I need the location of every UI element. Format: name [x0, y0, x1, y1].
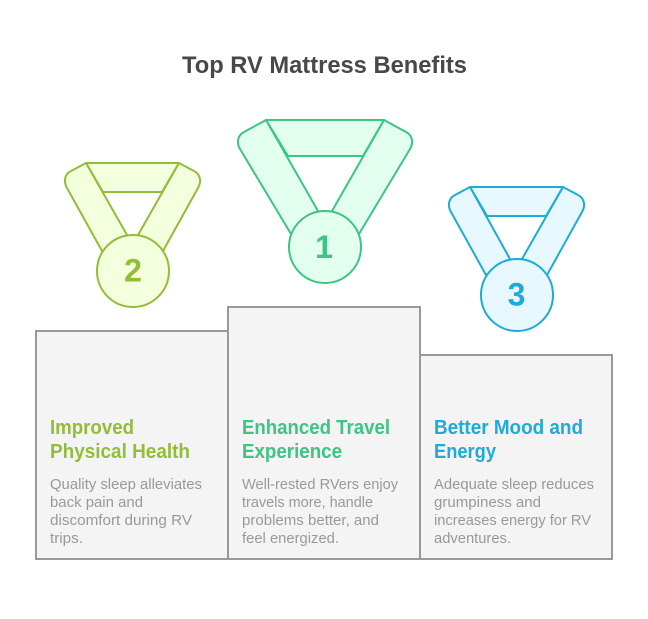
medal 3: blue [449, 187, 584, 331]
text: enhanced travel description: Well-rested RVers enjoy [242, 477, 399, 493]
panel: enhanced travel experience [228, 307, 420, 559]
text: enhanced travel description: problems better, and [242, 513, 379, 529]
medal 1: teal green [238, 120, 412, 283]
heading: improved physical health: Physical Health [50, 441, 190, 463]
text: improved physical health description: discomfort during RV [50, 513, 192, 529]
heading: enhanced travel experience: Experience [242, 441, 342, 463]
heading: better mood and energy: Better Mood and [434, 417, 583, 439]
text: improved physical health description: back pain and [50, 495, 143, 511]
medal number 1: 1 [315, 229, 333, 265]
text: improved physical health description: trips. [50, 531, 83, 547]
text: improved physical health description [50, 477, 202, 547]
medal number 3: 3 [508, 276, 525, 312]
text: enhanced travel description: feel energized. [242, 531, 339, 547]
text: better mood description: increases energy for RV [434, 513, 591, 529]
heading: improved physical health: Improved [50, 417, 134, 439]
medal number 2: 2 [124, 252, 142, 288]
panel: improved physical health [36, 331, 228, 559]
text: enhanced travel description [242, 477, 399, 547]
panel: better mood and energy [420, 355, 612, 559]
heading: enhanced travel experience: Enhanced Travel [242, 417, 390, 439]
heading: improved physical health [50, 417, 190, 463]
text: enhanced travel description: travels more, handle [242, 495, 373, 511]
heading: better mood and energy [434, 417, 583, 463]
medal 2: green [65, 163, 200, 307]
text: better mood description: grumpiness and [434, 495, 541, 511]
heading: enhanced travel experience [242, 417, 390, 463]
heading: better mood and energy: Energy [434, 441, 497, 463]
text: better mood description: Adequate sleep reduces [434, 477, 594, 493]
text: improved physical health description: Quality sleep alleviates [50, 477, 202, 493]
text: better mood description [434, 477, 594, 547]
text: better mood description: adventures. [434, 531, 511, 547]
title: Top RV Mattress Benefits [182, 52, 467, 79]
